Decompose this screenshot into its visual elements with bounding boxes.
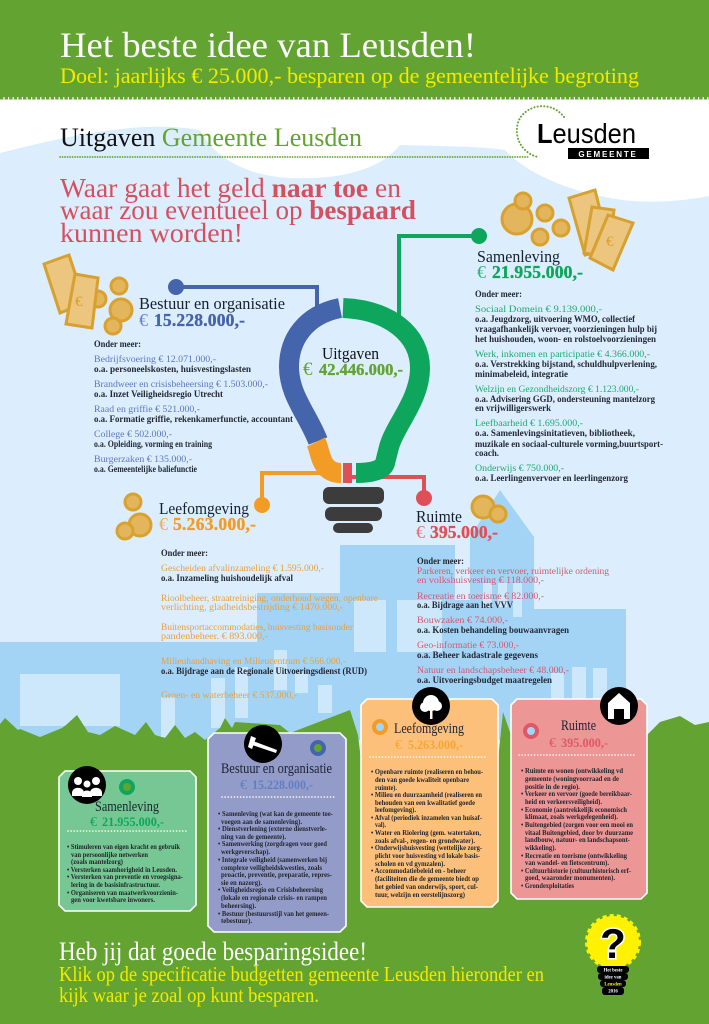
leefomgeving list: Milieuhandhaving en Milieucentrum € 566.000,-: [161, 656, 346, 666]
panel: bestuur en organisatie: [208, 725, 346, 932]
card bullets: gemeente (woningvoorraad en de: [525, 775, 619, 783]
subtitle: Doel: jaarlijks € 25.000,- besparen op de gemeentelijke begroting: [60, 63, 639, 88]
card bullets: werkgeverschap).: [221, 848, 270, 856]
bestuur heading: 15.228.000,-: [154, 310, 245, 330]
icon: house: [600, 687, 638, 725]
card bullets: • Versterken van preventie en vroegsigna-: [67, 873, 184, 881]
bestuur list: Burgerzaken € 135.000,-: [94, 454, 192, 464]
bestuur list: [94, 339, 293, 474]
bestuur list: o.a. Gemeentelijke baliefunctie: [94, 464, 197, 474]
card bullets: • Openbare ruimte (realiseren en behou-: [371, 768, 484, 776]
card bullets: • Grondexploitaties: [521, 882, 574, 890]
icon: gavel: [244, 725, 282, 763]
card bullets: positie in de regio).: [525, 783, 580, 791]
coins and bills: bestuur: €: [75, 294, 83, 310]
samenleving list: o.a. Advisering GGD, ondersteuning mantelzorg: [475, 394, 655, 404]
samenleving list: Sociaal Domein € 9.139.000,-: [475, 304, 602, 314]
card bullets: [218, 810, 334, 925]
icon: tree: [412, 687, 450, 725]
leefomgeving list: verlichting, gladheidsbestrijding € 1470.000,-: [161, 602, 343, 612]
card bullets: • Ruimte en wonen (ontwikkeling vd: [521, 767, 623, 775]
ruimte list: Geo-informatie € 73.000,-: [417, 640, 519, 650]
card bullets: vitaal Buitengebied, door bv duurzame: [525, 829, 633, 837]
card bullets: • Milieu en duurzaamheid (realiseren en: [371, 791, 482, 799]
skyline: [0, 490, 626, 740]
ruimte heading: [416, 507, 498, 542]
bestuur list: o.a. Inzet Veiligheidsregio Utrecht: [94, 389, 223, 399]
icon: people: [68, 766, 106, 804]
card amount: €: [395, 738, 402, 753]
main question: [60, 173, 416, 248]
bestuur heading: [139, 294, 285, 330]
footer call to action: [59, 962, 544, 1007]
card bullets: plicht voor huisvesting vd lokale basis-: [375, 852, 481, 860]
card bullets: het gebied van onderwijs, sport, cul-: [375, 883, 479, 891]
card bullets: [371, 768, 484, 899]
leefomgeving list: o.a. Bijdrage aan de Regionale Uitvoeringsdienst (RUD): [161, 666, 367, 676]
card title: Bestuur en organisatie: [221, 761, 332, 777]
card amount: 15.228.000,-: [252, 778, 313, 792]
samenleving heading: [477, 247, 583, 282]
card bullets: • Veiligheidsregio en Crisisbeheersing: [218, 886, 323, 894]
bestuur list: Raad en griffie € 521.000,-: [94, 404, 200, 414]
leefomgeving heading: €: [159, 514, 168, 534]
leefomgeving heading: 5.263.000,-: [173, 514, 256, 534]
icon: question bulb: Leusden: [604, 982, 622, 988]
samenleving list: o.a. Leerlingenvervoer en leerlingenzorg: [475, 473, 628, 483]
samenleving heading: Samenleving: [477, 247, 560, 266]
samenleving list: o.a. Verstrekking bijstand, schuldhulpverlening,: [475, 359, 657, 369]
card bullets: gen voor kwetsbare inwoners.: [71, 896, 155, 904]
coins and bills: bestuur: [44, 255, 132, 334]
ruimte heading: Ruimte: [416, 507, 462, 526]
card bullets: • Versterken saamhorigheid in Leusden.: [67, 866, 177, 874]
icon: ring: [121, 781, 133, 793]
card amount: 395.000,-: [561, 736, 608, 750]
card bullets: • Cultuurhistorie (cultuurhistorisch erf-: [521, 867, 632, 875]
samenleving list: Onderwijs € 750.000,-: [475, 463, 564, 473]
bestuur list: College € 502.000,-: [94, 429, 172, 439]
ruimte list: o.a. Kosten behandeling bouwaanvragen: [417, 625, 569, 635]
samenleving heading: 21.955.000,-: [492, 262, 583, 282]
icon: ring: [525, 725, 537, 737]
ruimte list: Onder meer:: [417, 556, 464, 566]
card bullets: [67, 843, 184, 904]
icon: question bulb: ?: [600, 920, 626, 967]
samenleving list: het huishouden, woon- en rolstoelvoorzieningen: [475, 334, 656, 344]
card bullets: beheersing).: [221, 902, 256, 910]
card bullets: scholen en vd gymzalen).: [375, 860, 445, 868]
bestuur heading: €: [139, 310, 148, 330]
panel: samenleving: [59, 766, 196, 911]
leefomgeving heading: Leefomgeving: [159, 499, 249, 518]
header band: [0, 0, 709, 98]
card bullets: • Water en Riolering (gem. watertaken,: [371, 829, 481, 837]
card bullets: [521, 767, 633, 890]
bulb total: [303, 344, 403, 380]
leefomgeving list: pandenbeheer. € 893.000,-: [161, 631, 268, 641]
card amount: 21.955.000,-: [102, 815, 164, 829]
section heading: Uitgaven Gemeente Leusden: [60, 123, 362, 152]
leefomgeving list: Buitensportaccommodaties, huisvesting basisonder: [161, 622, 353, 632]
icon: question bulb: 2016: [608, 990, 618, 994]
ruimte list: [417, 556, 610, 685]
card bullets: (lokale en regionale crisis- en rampen: [221, 894, 327, 902]
ruimte list: Natuur en landschapsbeheer € 48.000,-: [417, 665, 569, 675]
samenleving list: Werk, inkomen en participatie € 4.366.000,-: [475, 349, 650, 359]
leefomgeving list: Rioolbeheer, straatreiniging, onderhoud wegen, openbare: [161, 593, 378, 603]
main question: Waar gaat het geld naar toe en: [60, 173, 402, 203]
card bullets: klimaat, zoals werkgelegenheid).: [525, 813, 618, 821]
icon: question bulb: Het beste: [603, 968, 623, 974]
card bullets: landbouw, natuur- en landschapsont-: [525, 836, 631, 844]
card bullets: • Integrale veiligheid (samenwerken bij: [218, 856, 327, 864]
white clouds: [0, 97, 709, 202]
ruimte heading: 395.000,-: [430, 522, 498, 542]
samenleving list: vraagafhankelijk vervoer, voorzieningen hulp bij: [475, 324, 657, 334]
card bullets: • Onderwijshuisvesting (wettelijke zorg-: [371, 844, 483, 852]
card bullets: van persoonlijke netwerken: [71, 851, 148, 859]
ruimte list: o.a. Bijdrage aan het VVV: [417, 600, 513, 610]
card bullets: proactie, preventie, preparatie, repres-: [221, 871, 333, 879]
card bullets: voegen aan de samenleving).: [221, 818, 302, 826]
card bullets: wikkeling).: [525, 844, 556, 852]
samenleving list: Leefbaarheid € 1.695.000,-: [475, 418, 583, 428]
bulb total: 42.446.000,-: [319, 360, 403, 379]
connector: samenleving: [399, 228, 487, 318]
card bullets: • Recreatie en toerisme (ontwikkeling: [521, 852, 627, 860]
ruimte list: o.a. Beheer kadastrale gegevens: [417, 650, 538, 660]
ruimte list: Recreatie en toerisme € 82.000,-: [417, 591, 544, 601]
leefomgeving heading: [159, 499, 256, 534]
footer heading: Heb jij dat goede besparingsidee!: [59, 937, 367, 966]
card bullets: • Verkeer en vervoer (goede bereikbaar-: [521, 790, 633, 798]
leefomgeving list: Gescheiden afvalinzameling € 1.595.000,-: [161, 563, 324, 573]
card bullets: den van goede kwaliteit openbare: [375, 776, 469, 784]
card bullets: • Dienstverlening (externe dienstverle-: [218, 825, 328, 833]
dotted rule: [60, 156, 530, 158]
card bullets: • Accommodatiebeleid en - beheer: [371, 867, 466, 875]
icon: ring: [374, 721, 386, 733]
card bullets: behouden van een kwalitatief goede: [375, 799, 475, 807]
card bullets: tebestuur).: [221, 917, 252, 925]
coins and bills: samenleving: [502, 190, 633, 270]
bestuur heading: Bestuur en organisatie: [139, 294, 285, 313]
ruimte list: Bouwzaken € 74.000,-: [417, 615, 508, 625]
logo: Leusden gemeente: Leusden: [537, 118, 636, 149]
card title: Leefomgeving: [394, 721, 464, 737]
card amount: €: [240, 778, 247, 793]
coins and bills: samenleving: €: [606, 234, 614, 250]
samenleving list: muzikale en sociaal-culturele vorming,buurtsport-: [475, 439, 663, 449]
card amount: €: [90, 815, 97, 830]
card bullets: zoals afval-, regen- en grondwater).: [375, 837, 475, 845]
connector: bestuur: [168, 279, 317, 312]
card bullets: (zoals mantelzorg): [71, 858, 124, 866]
samenleving list: o.a. Jeugdzorg, uitvoering WMO, collectief: [475, 314, 636, 324]
card title: Ruimte: [561, 718, 596, 734]
main question: waar zou eventueel op bespaard: [60, 195, 416, 225]
samenleving list: en vrijwilligerswerk: [475, 403, 551, 413]
card bullets: ning van de gemeente).: [221, 833, 286, 841]
ruimte heading: €: [416, 522, 425, 542]
leefomgeving list: Onder meer:: [161, 548, 208, 558]
card bullets: val).: [375, 821, 386, 829]
panel: ruimte: [511, 687, 647, 899]
ruimte list: o.a. Uitvoeringsbudget maatregelen: [417, 675, 552, 685]
logo: Leusden gemeente: [517, 106, 649, 159]
card bullets: lering in de basisinfrastructuur.: [71, 881, 160, 889]
bestuur list: o.a. personeelskosten, huisvestingslasten: [94, 364, 251, 374]
card bullets: • Bestuur (bestuursstijl van het gemeen-: [218, 910, 330, 918]
card bullets: • Samenwerking (zorgdragen voor goed: [218, 840, 327, 848]
card bullets: (faciliteiten die de gemeente biedt op: [375, 875, 479, 883]
card bullets: sie en nazorg).: [221, 879, 262, 887]
light bulb: [289, 308, 420, 533]
card bullets: • Stimuleren van eigen kracht en gebruik: [67, 843, 180, 851]
card amount: €: [549, 736, 556, 751]
icon: question bulb: idee van: [605, 976, 622, 980]
logo: Leusden gemeente: GEMEENTE: [578, 150, 638, 159]
samenleving heading: €: [477, 262, 486, 282]
card bullets: van wandel- en fietscentrum).: [525, 859, 609, 867]
card bullets: • Economie (aantrekkelijk economisch: [521, 806, 627, 814]
footer call to action: Klik op de specificatie budgetten gemeente Leusden hieronder en: [59, 962, 544, 986]
footer call to action: kijk waar je zoal op kunt besparen.: [59, 983, 319, 1007]
bulb total: Uitgaven: [322, 344, 379, 363]
card bullets: • Samenleving (wat kan de gemeente toe-: [218, 810, 334, 818]
card bullets: complexe veiligheidskwesties, zoals: [221, 864, 322, 872]
bestuur list: Brandweer en crisisbeheersing € 1.503.000,-: [94, 379, 268, 389]
icon: question bulb: [587, 916, 639, 995]
samenleving list: o.a. Samenlevingsinitatieven, bibliotheek,: [475, 428, 635, 438]
leefomgeving list: o.a. Inzameling huishoudelijk afval: [161, 573, 293, 583]
card bullets: goed, waaronder monumenten).: [525, 874, 615, 882]
card bullets: • Afval (periodiek inzamelen van huisaf-: [371, 814, 483, 822]
card bullets: • Organiseren van maatwerkvoorzienin-: [67, 889, 179, 897]
main question: kunnen worden!: [60, 218, 243, 248]
bestuur list: Bedrijfsvoering € 12.071.000,-: [94, 354, 216, 364]
samenleving list: [475, 289, 663, 483]
card bullets: • Buitengebied (zorgen voor een mooi en: [521, 821, 633, 829]
bestuur list: Onder meer:: [94, 339, 141, 349]
samenleving list: Onder meer:: [475, 289, 522, 299]
panel: leefomgeving: [361, 687, 498, 907]
bulb total: €: [303, 359, 313, 380]
card bullets: leefomgeving).: [375, 806, 416, 814]
grass: [0, 710, 709, 1024]
card bullets: tuur, welzijn en eerstelijnszorg): [375, 891, 466, 899]
card bullets: ruimte).: [375, 784, 397, 792]
card amount: 5.263.000,-: [408, 738, 463, 752]
coins: leefomgeving: [117, 494, 151, 539]
connector: ruimte: [350, 477, 432, 506]
ruimte list: en volkshuisvesting € 118.000,-: [417, 575, 544, 585]
card title: Samenleving: [95, 799, 159, 815]
card bullets: heid en verkeersveiligheid).: [525, 798, 602, 806]
bestuur list: o.a. Opleiding, vorming en training: [94, 439, 212, 449]
samenleving list: minimabeleid, integratie: [475, 369, 568, 379]
bestuur list: o.a. Formatie griffie, rekenkamerfunctie, accountant: [94, 414, 293, 424]
leefomgeving list: Groen- en waterbeheer € 537.000,-: [161, 690, 297, 700]
icon: ring: [312, 742, 324, 754]
samenleving list: coach.: [475, 448, 499, 458]
title: Het beste idee van Leusden!: [60, 25, 476, 65]
coins: ruimte: [472, 496, 506, 522]
leefomgeving list: [161, 548, 378, 700]
connector: leefomgeving: [254, 473, 322, 513]
ruimte list: Parkeren, verkeer en vervoer, ruimtelijke ordening: [417, 566, 610, 576]
samenleving list: Welzijn en Gezondheidszorg € 1.123.000,-: [475, 384, 639, 394]
